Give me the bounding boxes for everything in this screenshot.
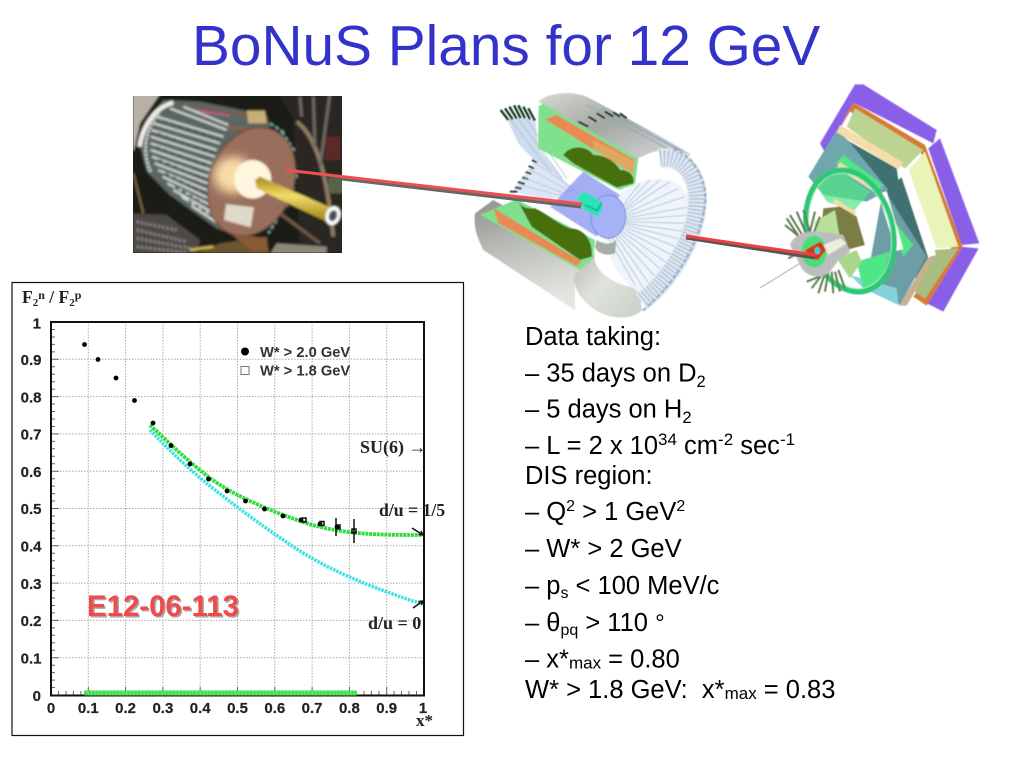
y axis labels: 0 [33,688,41,705]
y axis labels: 0.4 [21,538,42,556]
x axis labels [47,700,427,717]
y axis labels: 0.9 [21,352,42,369]
inner olive cone [820,207,865,252]
x axis labels: 1 [419,700,427,717]
text block: DIS region: ° [655,610,665,637]
text block: data taking: – 5 days on H [525,396,682,424]
title: BoNuS Plans for 12 GeV [192,15,820,78]
text block: DIS region: 2 [566,498,575,515]
text block: DIS region: < 100 MeV/c [568,572,720,600]
text block: DIS region [525,462,835,704]
text block: DIS region: > 110 [578,609,655,637]
thin particle track [760,262,802,288]
x axis labels: 0.2 [115,700,136,717]
x axis title: x* [416,711,433,730]
y axis title: n [38,288,45,302]
y axis labels: 0.3 [21,576,42,593]
y axis title: p [75,288,82,302]
y axis labels: 0.2 [21,613,42,630]
text block: data taking: -1 [780,430,795,449]
x axis labels: 0.1 [78,700,99,717]
outer ring of cable ribs [642,149,705,311]
text block: DIS region: s [560,585,568,602]
experiment label: E12-06-113 [88,592,240,624]
y axis labels: 0.8 [21,390,42,406]
y axis labels: 0.7 [21,426,42,444]
text block: DIS region: 2 [676,498,685,515]
y axis title: F [22,287,33,307]
fans of tracker wires [785,210,845,293]
x axis labels: 0.5 [227,700,248,717]
left fan of readout lines [501,105,567,183]
green torus ring [793,160,907,302]
y axis labels: 1 [33,316,41,332]
y axis labels: 0.6 [21,464,42,481]
y axis title: / F [45,287,69,307]
text block: data taking: 34 [658,430,677,449]
curve: d/u = 1/5 [150,425,422,535]
blue inner cylinder [550,172,626,238]
text block: DIS region: = 0.80 [601,646,680,674]
text block: data taking: Data taking: [525,323,661,351]
y axis labels [21,316,42,705]
label: d/u = 0: d/u = 0 [368,613,421,633]
text block: data taking: – L = 2 x 10 [525,432,658,460]
panel: F2n/F2p chart [12,282,464,736]
label: d/u = 1/5: d/u = 1/5 [379,500,445,520]
photo: detector hardware [133,96,342,253]
purple outer panels [820,84,979,312]
curve: d/u = 0 [150,430,422,604]
y axis labels: 0.5 [21,501,42,518]
lower magnet block [475,199,642,317]
second layer bars [833,162,903,251]
text block: DIS region: > 1 GeV [575,498,676,526]
arrow: photo to central detector [285,170,582,207]
central grey barrel [790,231,850,277]
open-square points and error bars [302,518,356,543]
text block: DIS region: – x* [525,646,569,674]
x axis labels: 0.8 [339,700,360,717]
left fan lower spokes [510,160,580,200]
text block: DIS region: pq [560,622,578,639]
experiment label: E12-06-113 [87,590,239,623]
text block: DIS region: – θ [525,609,560,637]
dark and mid teal panels [808,130,935,306]
legend [241,345,350,380]
y axis title: 2 [69,297,75,309]
grid [51,322,424,695]
x axis labels: 0 [47,700,55,717]
cream and white bars [837,125,936,258]
kinematic coverage bar [84,690,357,696]
text block: DIS region: W* > 1.8 GeV: x* [525,676,725,704]
axis ticks [51,330,416,695]
diagram: central detector [475,93,705,317]
diagram: full detector assembly [785,84,979,312]
text block: data taking [525,323,795,460]
arrow: central detector to full assembly [686,236,815,258]
label: SU(6): SU(6) → [360,437,426,458]
label: d/u = 1/5 [379,500,445,535]
text block: data taking: -2 [718,430,733,449]
label: d/u = 0 [368,601,423,633]
green inner panels [817,155,913,288]
pale end-plate radial fan [605,179,693,293]
text block: DIS region: max [725,684,757,703]
x axis labels: 0.9 [376,700,397,717]
text block: DIS region: – Q [525,498,566,526]
text block: data taking: – 35 days on D [525,360,697,388]
text block: data taking: 2 [682,409,692,427]
orange frame [840,102,963,306]
legend: W* > 2.0 GeV [260,345,350,361]
text block: data taking: 2 [697,373,706,391]
x axis labels: 0.7 [302,700,323,717]
text block: data taking: sec [733,432,780,460]
fan of circuit cards [139,100,270,234]
plot frame [51,322,424,696]
legend: W* > 1.8 GeV [260,364,350,380]
text block: DIS region: max [569,654,602,672]
upper magnet block [538,93,693,190]
y axis labels: 0.1 [21,650,42,668]
vertical grey support [595,237,617,255]
text block: DIS region: DIS region: [525,462,653,490]
y axis title: 2 [33,297,39,309]
x axis labels: 0.6 [264,700,285,717]
text block: data taking: cm [677,432,718,460]
cyan target box [577,192,603,217]
x axis labels: 0.4 [190,700,211,717]
data points [82,342,339,529]
text block: DIS region: – W* > 2 GeV [525,535,682,563]
x axis labels: 0.3 [152,700,173,717]
text block: DIS region: – p [525,572,560,600]
pale panels [847,108,958,299]
text block: DIS region: = 0.83 [757,676,835,704]
